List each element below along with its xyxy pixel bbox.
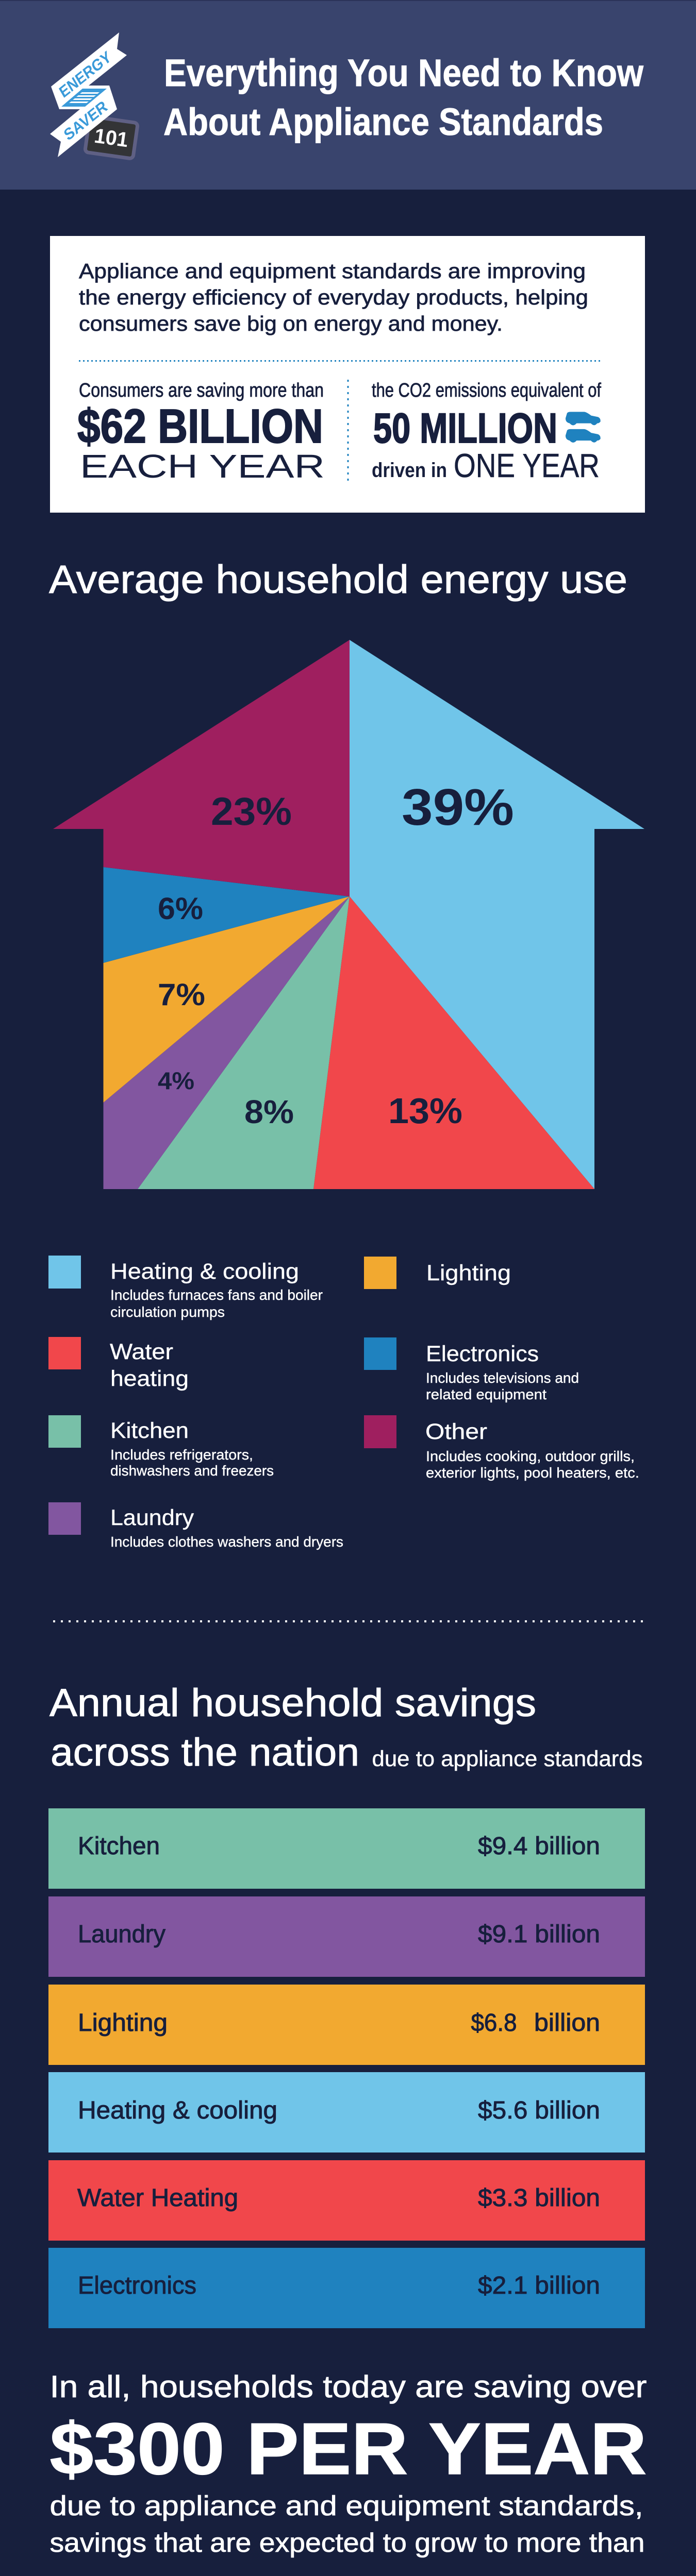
- legend: other: [364, 1415, 639, 1481]
- stat: 62 billion saved: Consumers are saving more than: [79, 380, 324, 401]
- bar: water heating: [48, 2160, 645, 2241]
- panel: intro and headline stats: [50, 236, 645, 513]
- callout: household savings summary: $300 PER YEAR: [49, 2408, 647, 2490]
- bar: electronics: [48, 2248, 645, 2328]
- legend: water heating: heating: [110, 1366, 189, 1391]
- legend: kitchen: Includes refrigerators,: [110, 1447, 253, 1463]
- bar: lighting: Lighting: [78, 2009, 168, 2037]
- callout: household savings summary: [49, 2369, 647, 2576]
- bar: lighting: billion: [534, 2009, 600, 2037]
- bar: heating and cooling: Heating & cooling: [78, 2097, 277, 2124]
- stat: 50 million cars: 50 MILLION: [373, 405, 557, 452]
- heading: average household energy use: Average household energy use: [49, 557, 627, 602]
- bar: kitchen: Kitchen: [78, 1833, 160, 1860]
- icon: Energy Saver 101 logo: ENERGY: [57, 48, 114, 101]
- legend: heating and cooling: Includes furnaces fans and boiler: [110, 1287, 323, 1303]
- slice: other 23%: 23%: [211, 790, 292, 834]
- bar: heating and cooling: $5.6 billion: [478, 2097, 600, 2124]
- 101 badge: [85, 116, 138, 159]
- bar: lighting: [48, 1985, 645, 2065]
- slice: heating and cooling 39%: [350, 640, 644, 1189]
- heading: annual household savings: across the nation: [51, 1731, 359, 1774]
- legend: water heating: [48, 1337, 189, 1391]
- intro text: the energy efficiency of everyday products, helping: [79, 285, 588, 309]
- legend: kitchen: [48, 1415, 274, 1479]
- legend: heating and cooling: [48, 1256, 323, 1320]
- slice: lighting 7%: 7%: [158, 977, 205, 1012]
- stat: 50 million cars: [372, 380, 601, 484]
- slice: laundry 4%: 4%: [158, 1067, 194, 1094]
- legend: heating and cooling: Heating & cooling: [110, 1259, 299, 1284]
- slice: lighting 7%: [103, 896, 350, 1103]
- callout: household savings summary: due to appliance and equipment standards,: [49, 2490, 643, 2521]
- slice: laundry 4%: [103, 896, 350, 1189]
- bar: lighting: $6.8: [471, 2009, 517, 2037]
- slice: water heating 13%: 13%: [388, 1091, 462, 1131]
- bar: water heating: $3.3 billion: [478, 2184, 600, 2212]
- 101 badge: 101: [93, 125, 130, 151]
- legend: other: Other: [425, 1419, 487, 1444]
- chart: house-shaped pie of energy use: [53, 640, 644, 1189]
- callout: household savings summary: savings that are expected to grow to more than: [49, 2528, 644, 2558]
- legend: water heating: Water: [110, 1340, 173, 1364]
- bar: laundry: Laundry: [78, 1921, 165, 1948]
- icon: Energy Saver 101 logo: [50, 32, 138, 159]
- slice: kitchen 8%: [138, 896, 350, 1189]
- legend: electronics: [364, 1337, 579, 1402]
- stat: 50 million cars: ONE YEAR: [454, 447, 600, 484]
- slice: water heating 13%: [313, 896, 594, 1189]
- icon: Energy Saver 101 logo: SAVER: [61, 97, 110, 144]
- legend: other: exterior lights, pool heaters, etc.: [426, 1465, 639, 1481]
- legend: lighting: Lighting: [426, 1261, 511, 1285]
- stat: 50 million cars: driven in: [372, 459, 447, 482]
- title: [163, 52, 643, 143]
- legend: kitchen: Kitchen: [110, 1418, 189, 1443]
- stat: 50 million cars: the CO2 emissions equivalent of: [372, 380, 601, 401]
- legend: electronics: related equipment: [426, 1386, 546, 1402]
- legend: electronics: Electronics: [426, 1342, 539, 1366]
- icon: cars: [566, 412, 601, 443]
- slice: heating and cooling 39%: 39%: [402, 778, 514, 836]
- legend: kitchen: dishwashers and freezers: [110, 1463, 274, 1479]
- intro text: consumers save big on energy and money.: [79, 312, 503, 335]
- legend: lighting: [364, 1257, 511, 1289]
- bar: kitchen: $9.4 billion: [478, 1833, 600, 1860]
- legend: heating and cooling: circulation pumps: [110, 1304, 225, 1320]
- bar: electronics: Electronics: [78, 2272, 196, 2299]
- bar: heating and cooling: [48, 2072, 645, 2153]
- stat: 62 billion saved: $62 BILLION: [77, 399, 323, 453]
- bar: water heating: Water Heating: [77, 2184, 238, 2212]
- bar: kitchen: [48, 1808, 645, 1889]
- slice: electronics 6%: 6%: [158, 891, 203, 926]
- heading: annual household savings: due to appliance standards: [372, 1747, 642, 1771]
- heading: annual household savings: [49, 1681, 642, 1774]
- slice: other 23%: [53, 640, 350, 896]
- header banner: [0, 0, 696, 190]
- title: Everything You Need to Know: [164, 52, 643, 94]
- intro text: [79, 259, 588, 335]
- title: About Appliance Standards: [163, 100, 603, 143]
- bar: laundry: [48, 1896, 645, 1977]
- legend: laundry: Laundry: [110, 1505, 194, 1530]
- stat: 62 billion saved: [77, 380, 325, 485]
- legend: [48, 1256, 639, 1550]
- slice: electronics 6%: [103, 867, 350, 963]
- callout: household savings summary: In all, households today are saving over: [49, 2369, 647, 2404]
- legend: electronics: Includes televisions and: [426, 1370, 579, 1386]
- slice: kitchen 8%: 8%: [244, 1093, 294, 1130]
- intro text: Appliance and equipment standards are improving: [79, 259, 586, 283]
- bar: electronics: $2.1 billion: [478, 2272, 600, 2299]
- legend: laundry: [48, 1502, 343, 1550]
- chart: savings by category: [48, 1808, 645, 2328]
- legend: laundry: Includes clothes washers and dryers: [110, 1534, 343, 1550]
- stat: 62 billion saved: EACH YEAR: [80, 448, 325, 485]
- bar: laundry: $9.1 billion: [478, 1921, 600, 1948]
- legend: other: Includes cooking, outdoor grills,: [426, 1448, 635, 1464]
- heading: annual household savings: Annual household savings: [49, 1681, 536, 1725]
